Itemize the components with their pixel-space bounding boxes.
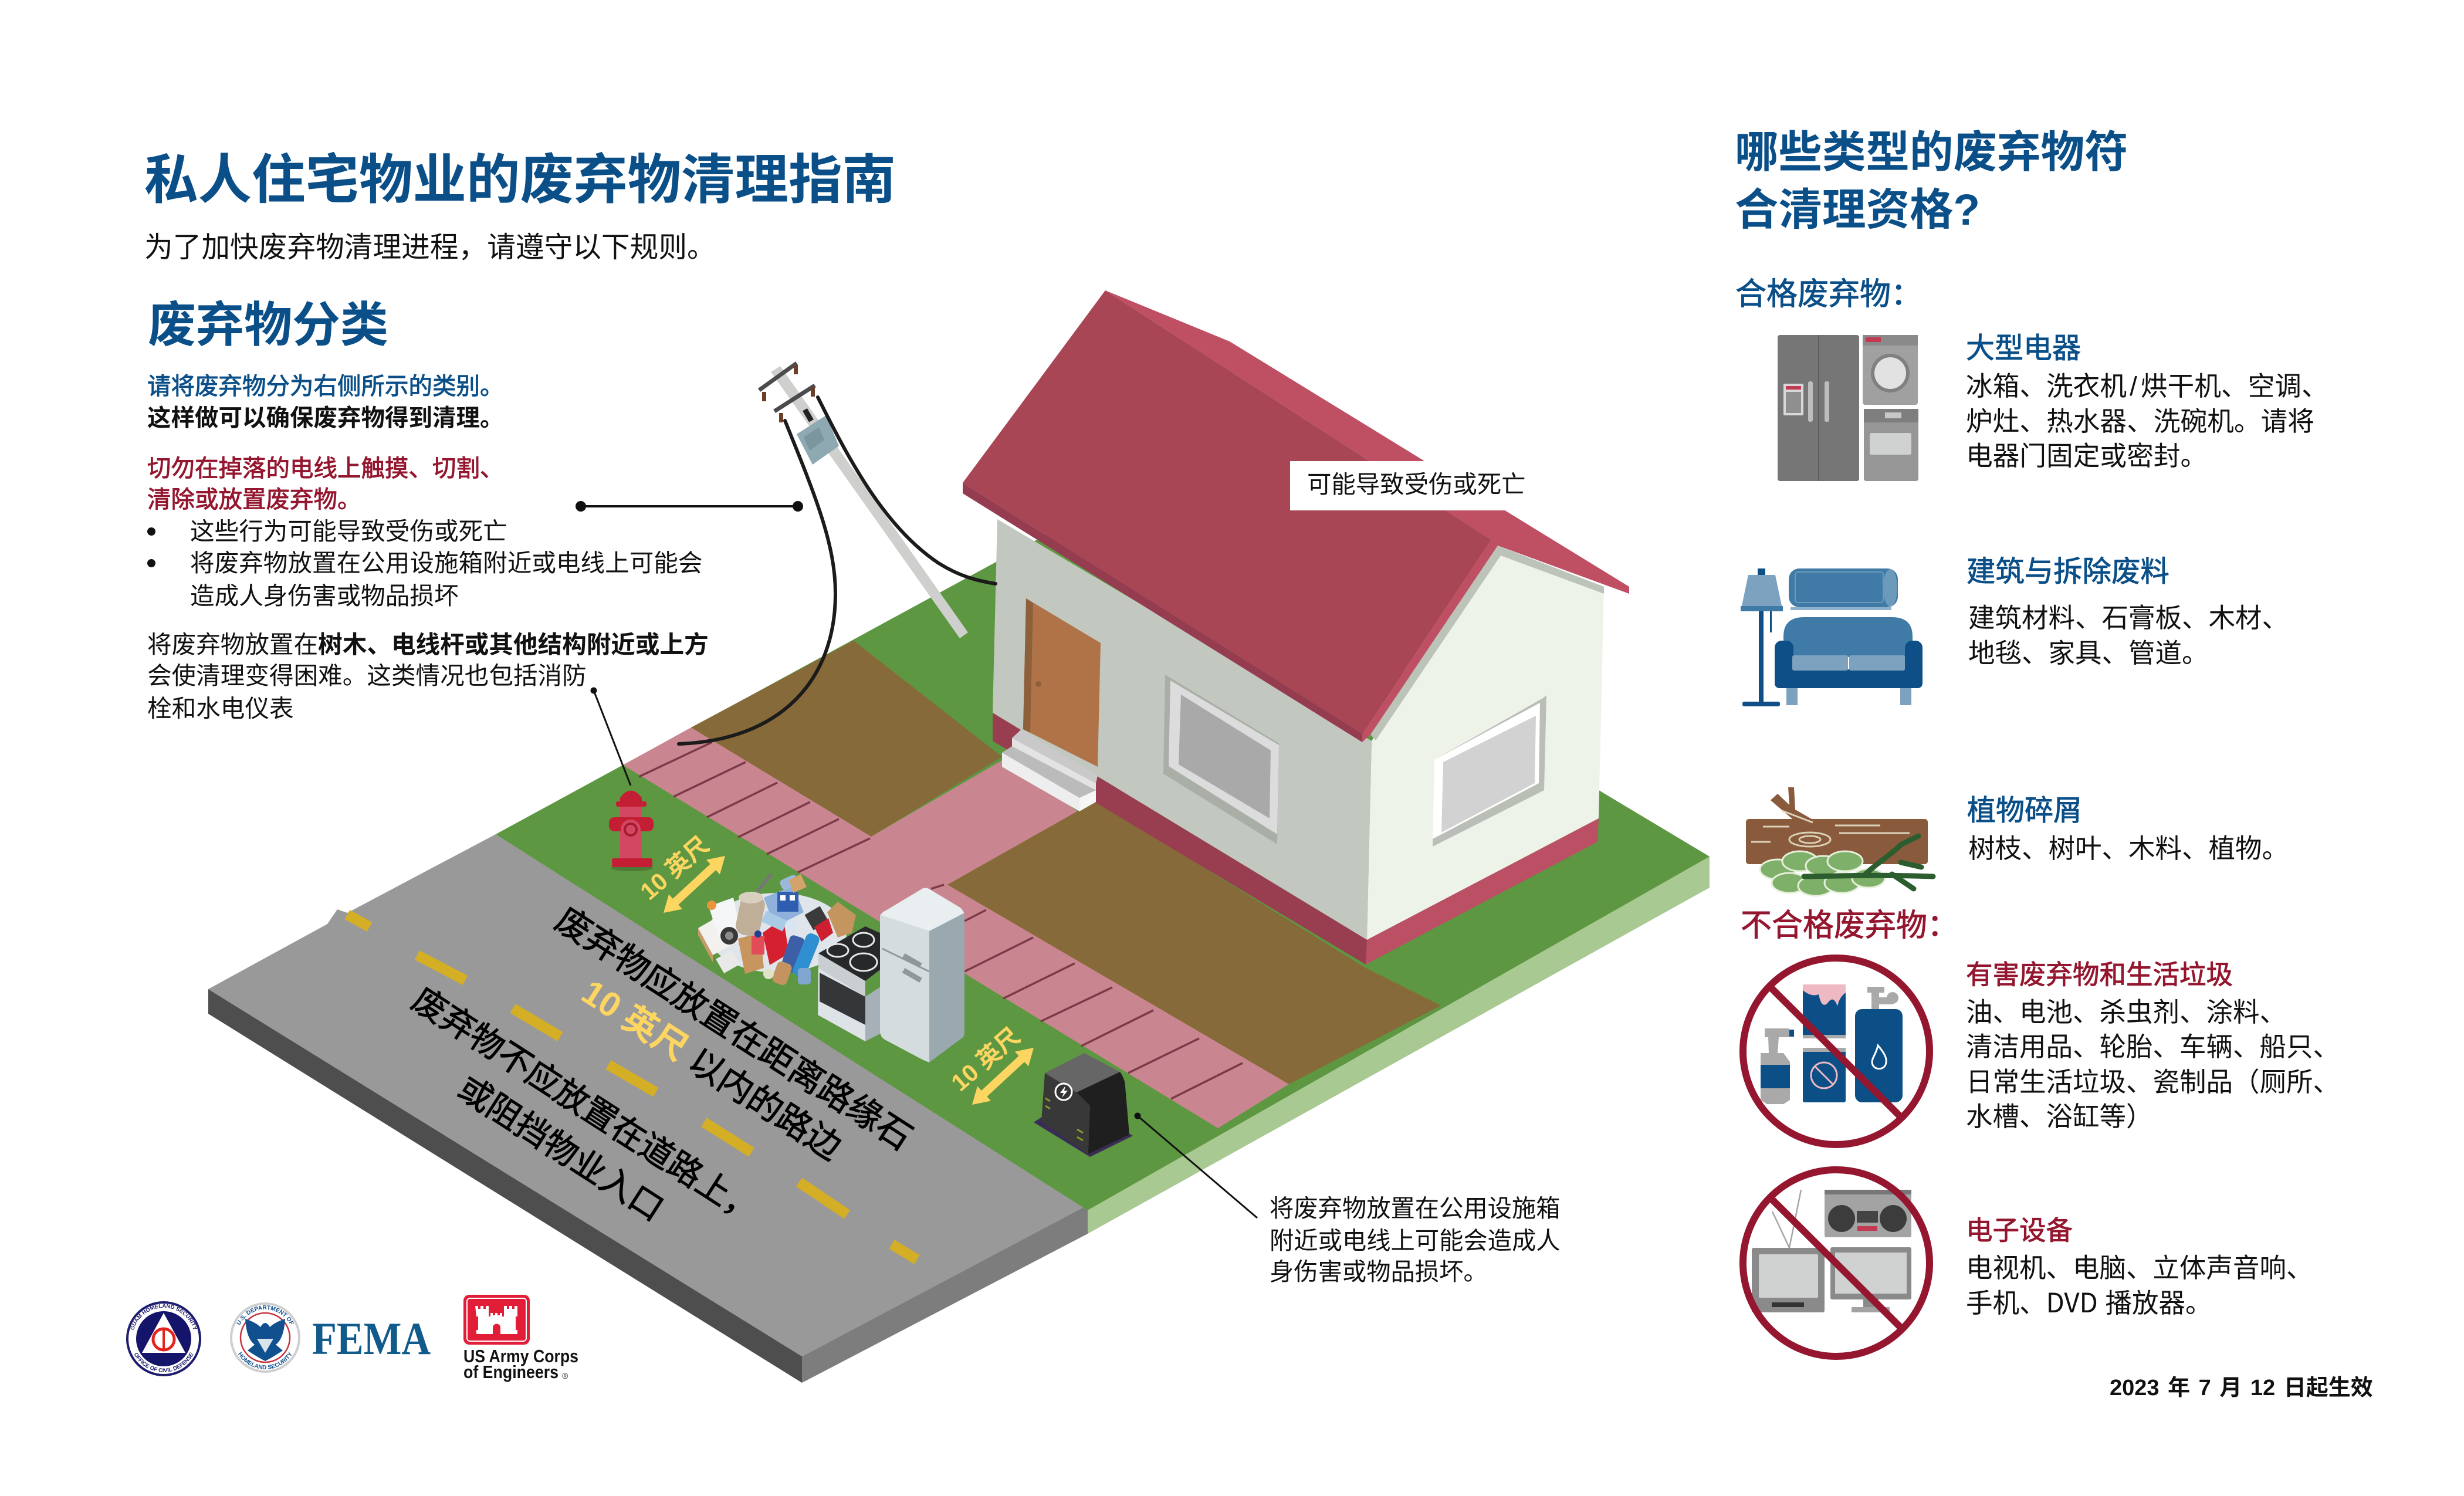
text block: sorting instruction: 请将废弃物分为右侧所示的类别。 bbox=[147, 373, 503, 400]
logo: us army corps of engineers: US Army Corps bbox=[463, 1346, 578, 1366]
heading: eligible types: 合清理资格? bbox=[1735, 185, 1980, 234]
text: vegetative debris: 植物碎屑 bbox=[1967, 795, 2082, 827]
text block: placement near structures: 将废弃物放置在树木、电线杆或其他结构附近或上方 bbox=[147, 631, 709, 658]
text block: sorting instruction bbox=[147, 373, 503, 431]
house bbox=[963, 290, 1629, 964]
icon: construction debris bbox=[1741, 568, 1923, 706]
title: 私人住宅物业的废弃物清理指南 bbox=[144, 150, 896, 210]
bullet list bbox=[147, 517, 702, 610]
text: vegetative debris: 树枝、树叶、木料、植物。 bbox=[1968, 834, 2289, 864]
callout: utility box hazard: 附近或电线上可能会造成人 bbox=[1270, 1227, 1561, 1254]
text: hazardous waste: 清洁用品、轮胎、车辆、船只、 bbox=[1966, 1032, 2340, 1062]
logo: us army corps of engineers bbox=[463, 1295, 578, 1382]
text: vegetative debris bbox=[1967, 795, 2289, 864]
front steps bbox=[1002, 729, 1098, 811]
bullet list: 造成人身伤害或物品损坏 bbox=[190, 582, 459, 610]
stove bbox=[818, 926, 882, 1041]
text block: placement near structures: 会使清理变得困难。这类情况也包括消防 bbox=[147, 662, 587, 689]
text block: sorting instruction: 这样做可以确保废弃物得到清理。 bbox=[147, 404, 503, 431]
logo: dhs seal: HOMELAND SECURITY bbox=[238, 1352, 292, 1369]
leader line: power lines bbox=[577, 502, 802, 510]
icon: large appliances bbox=[1778, 335, 1918, 481]
text: hazardous waste: 油、电池、杀虫剂、涂料、 bbox=[1966, 997, 2286, 1027]
text: hazardous waste: 日常生活垃圾、瓷制品（厕所、 bbox=[1966, 1067, 2340, 1097]
text: construction debris: 建筑与拆除废料 bbox=[1967, 556, 2169, 588]
bullet list: 将废弃物放置在公用设施箱附近或电线上可能会 bbox=[190, 549, 702, 577]
text: large appliances: 电器门固定或密封。 bbox=[1966, 441, 2207, 471]
text: electronics: 电视机、电脑、立体声音响、 bbox=[1966, 1253, 2313, 1283]
yard: dirt left bbox=[691, 641, 1002, 837]
downed power lines bbox=[679, 397, 996, 744]
icon: electronics prohibited bbox=[1743, 1170, 1930, 1356]
logo: guam civil defense bbox=[126, 1301, 201, 1376]
text: electronics: 电子设备 bbox=[1966, 1216, 2073, 1245]
effective date: 2023 年 7 月 12 日起生效 bbox=[2110, 1376, 2373, 1400]
logo: dhs seal bbox=[230, 1302, 300, 1373]
road text: do not block: 废弃物不应放置在道路上， bbox=[405, 981, 766, 1231]
heading: eligible types: 哪些类型的废弃物符 bbox=[1735, 128, 2128, 177]
text: hazardous waste: 有害废弃物和生活垃圾 bbox=[1966, 960, 2233, 990]
heading: waste sorting: 废弃物分类 bbox=[148, 299, 388, 352]
subheading: ineligible waste: 不合格废弃物： bbox=[1741, 908, 1958, 943]
lawn bbox=[496, 499, 1710, 1234]
text block: placement near structures bbox=[147, 631, 709, 722]
bullet list: 这些行为可能导致受伤或死亡 bbox=[190, 517, 507, 545]
road text: do not block: 或阻挡物业入口 bbox=[451, 1069, 670, 1228]
distance label 1: 10 英尺 bbox=[635, 831, 715, 905]
text: construction debris bbox=[1967, 556, 2289, 668]
yard: dirt right bbox=[947, 801, 1441, 1084]
callout: injury or death bbox=[1290, 461, 1549, 510]
text: large appliances: 大型电器 bbox=[1966, 333, 2081, 364]
leader line: utility box bbox=[1135, 1113, 1257, 1218]
callout: injury or death: 可能导致受伤或死亡 bbox=[1307, 471, 1526, 498]
callout: utility box hazard bbox=[1270, 1195, 1561, 1285]
text: large appliances bbox=[1966, 333, 2328, 471]
logo: us army corps of engineers: of Engineers bbox=[463, 1362, 559, 1382]
utility box bbox=[1034, 1053, 1133, 1157]
right window bbox=[1433, 695, 1546, 847]
utility pole bbox=[759, 363, 968, 638]
logo: fema: FEMA bbox=[312, 1313, 431, 1364]
logo: guam civil defense: GUAM HOMELAND SECURITY bbox=[130, 1304, 197, 1329]
text: large appliances: 炉灶、热水器、洗碗机。请将 bbox=[1966, 407, 2314, 436]
text block: power line warning: 切勿在掉落的电线上触摸、切割、 bbox=[147, 455, 503, 482]
callout: utility box hazard: 身伤害或物品损坏。 bbox=[1270, 1258, 1488, 1285]
house walls bbox=[993, 519, 1604, 964]
road text: distance rule: 废弃物应放置在距离路缘石 bbox=[549, 900, 919, 1157]
text: electronics: 手机、DVD 播放器。 bbox=[1966, 1282, 2212, 1321]
logo: dhs seal: U.S. DEPARTMENT OF bbox=[236, 1305, 295, 1325]
heading: eligible types bbox=[1735, 128, 2128, 234]
text: hazardous waste bbox=[1966, 960, 2340, 1132]
debris pile bbox=[698, 874, 856, 986]
door bbox=[1023, 598, 1101, 767]
road text: distance rule: 10 英尺 以内的路边 bbox=[575, 972, 848, 1167]
icon: hazardous waste prohibited bbox=[1743, 958, 1930, 1145]
text: hazardous waste: 水槽、浴缸等） bbox=[1966, 1102, 2153, 1132]
distance label 2: 10 英尺 bbox=[946, 1023, 1025, 1096]
distance arrow 2 bbox=[972, 1048, 1034, 1105]
text: construction debris: 地毯、家具、管道。 bbox=[1968, 638, 2209, 668]
illustration: isometric property scene bbox=[208, 290, 1710, 1383]
subtitle: 为了加快废弃物清理进程，请遵守以下规则。 bbox=[144, 232, 716, 263]
fire hydrant bbox=[609, 791, 654, 871]
left window bbox=[1163, 675, 1279, 844]
roof bbox=[963, 290, 1629, 742]
refrigerator bbox=[880, 888, 964, 1062]
subheading: eligible waste: 合格废弃物： bbox=[1735, 277, 1922, 312]
logo: guam civil defense: OFFICE OF CIVIL DEFENSE bbox=[134, 1352, 194, 1372]
road bbox=[208, 834, 1088, 1383]
distance arrow 1 bbox=[664, 856, 725, 913]
text block: placement near structures: 栓和水电仪表 bbox=[147, 695, 294, 722]
text block: power line warning bbox=[147, 455, 503, 513]
text: electronics bbox=[1966, 1216, 2313, 1321]
text block: power line warning: 清除或放置废弃物。 bbox=[147, 486, 361, 513]
callout: utility box hazard: 将废弃物放置在公用设施箱 bbox=[1270, 1195, 1561, 1222]
text: construction debris: 建筑材料、石膏板、木材、 bbox=[1968, 603, 2289, 633]
text: large appliances: 冰箱、洗衣机/烘干机、空调、 bbox=[1966, 371, 2328, 401]
icon: vegetative debris bbox=[1746, 787, 1933, 896]
leader line: fire hydrant bbox=[591, 688, 631, 786]
sidewalk bbox=[623, 727, 1289, 1128]
logo: us army corps of engineers: ® bbox=[562, 1371, 568, 1380]
